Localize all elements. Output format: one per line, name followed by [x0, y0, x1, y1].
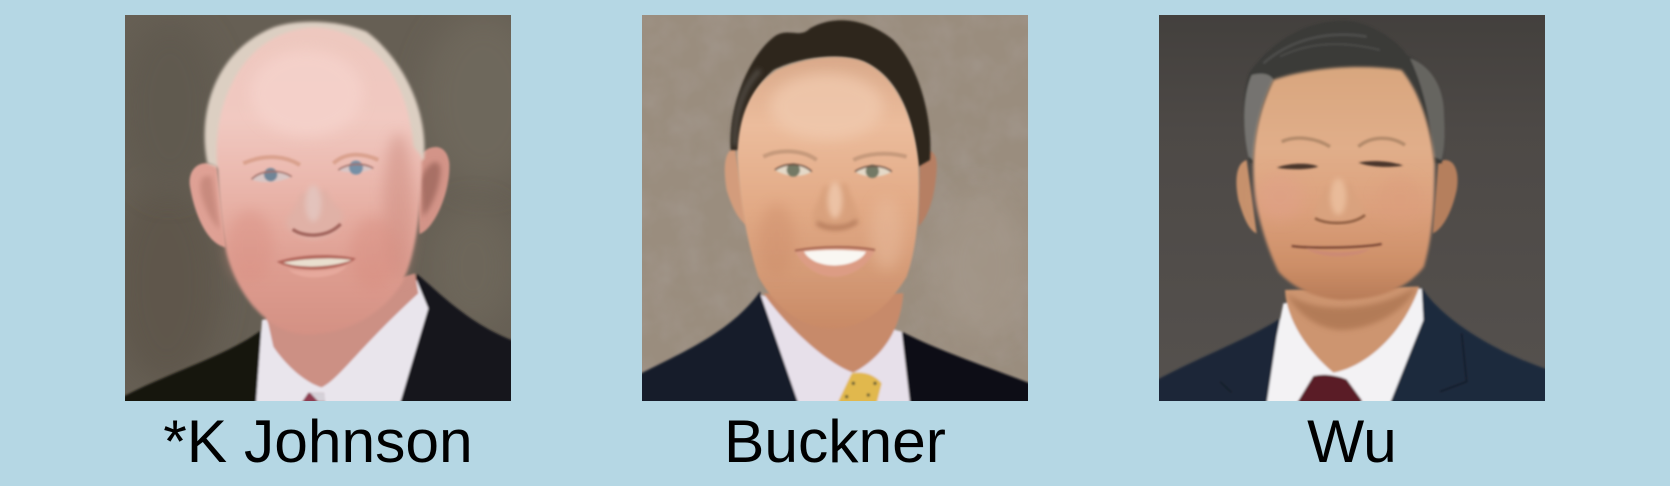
jacket right	[1388, 287, 1547, 403]
photo: Buckner	[642, 15, 1028, 401]
name: Wu: Wu	[1307, 407, 1397, 475]
left ear	[1236, 160, 1257, 233]
nose	[286, 190, 343, 239]
head	[737, 57, 919, 328]
tie	[837, 373, 882, 403]
hair	[1244, 21, 1445, 163]
left ear	[190, 163, 226, 247]
hair	[205, 22, 424, 173]
jacket left	[1157, 318, 1280, 403]
panel: K Johnson portrait	[125, 15, 511, 475]
jacket right	[397, 274, 513, 403]
jacket left	[123, 328, 263, 403]
panel: Buckner portrait	[642, 15, 1028, 475]
panel: Wu portrait	[1159, 15, 1545, 475]
neck	[267, 273, 418, 387]
right ear	[417, 147, 449, 234]
face shading	[770, 73, 883, 140]
head	[217, 27, 422, 334]
nose	[813, 183, 858, 226]
tie	[1297, 375, 1362, 403]
mouth	[795, 247, 875, 277]
shirt	[1267, 288, 1423, 403]
name: Buckner: Buckner	[724, 407, 946, 475]
right ear	[918, 151, 937, 227]
right ear	[1433, 160, 1458, 233]
photo: Wu	[1159, 15, 1545, 401]
photo: K Johnson	[125, 15, 511, 401]
shirt	[761, 295, 910, 403]
eyes	[243, 155, 378, 182]
mouth	[1292, 244, 1382, 256]
neck shadow	[1287, 287, 1417, 330]
left ear	[725, 148, 747, 225]
hair	[731, 20, 930, 167]
tie	[301, 393, 325, 403]
mouth	[277, 255, 356, 277]
jacket right	[902, 332, 1030, 403]
neck	[1285, 287, 1419, 373]
eyes	[763, 151, 907, 178]
face shading	[1257, 173, 1303, 220]
jacket left	[640, 292, 800, 403]
nose	[1313, 183, 1367, 223]
eyes	[1277, 138, 1405, 169]
face shading	[383, 133, 413, 280]
head	[1253, 67, 1435, 300]
neck	[763, 293, 903, 373]
name: K Johnson: *K Johnson	[163, 407, 473, 475]
shirt	[256, 280, 428, 403]
